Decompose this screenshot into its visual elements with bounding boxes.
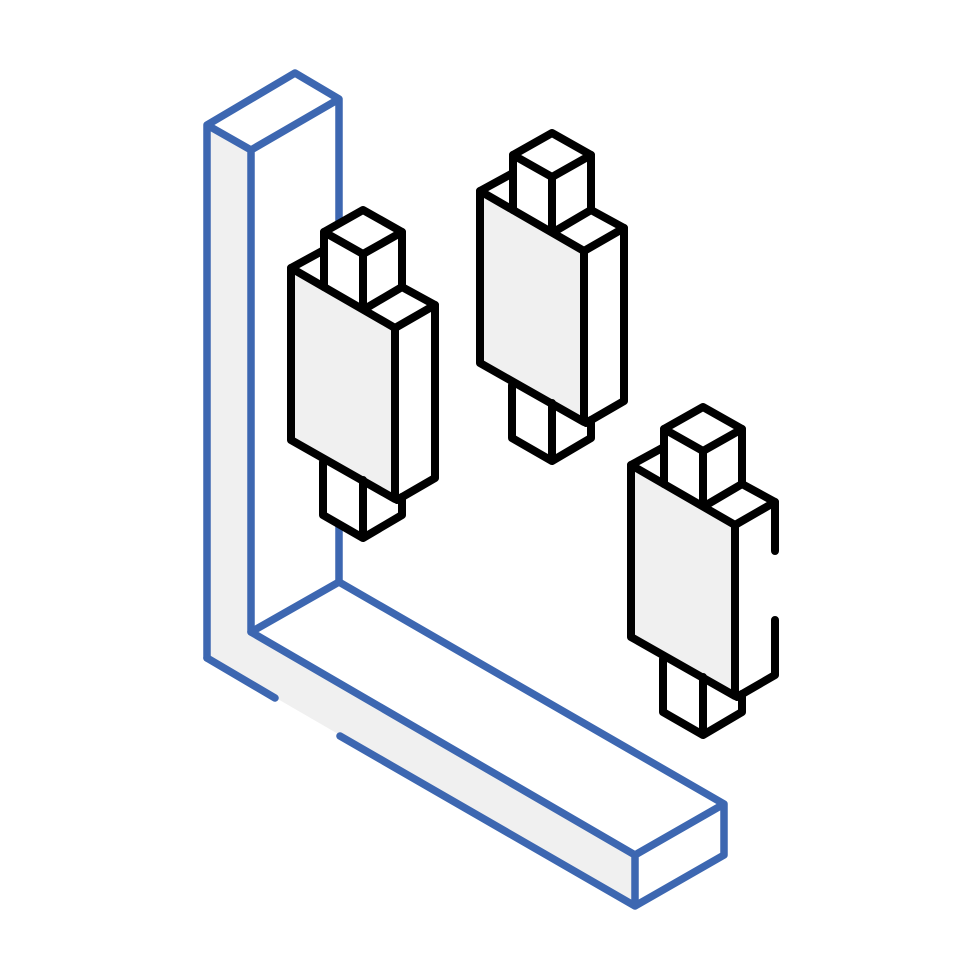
chart axes: [207, 73, 724, 906]
horizontal axis: [207, 582, 724, 906]
candlestick right: [631, 407, 775, 735]
vertical axis: [207, 73, 339, 658]
candlestick left: [291, 210, 435, 538]
candlestick middle: [480, 133, 624, 461]
axes shaded side faces: [207, 125, 635, 906]
